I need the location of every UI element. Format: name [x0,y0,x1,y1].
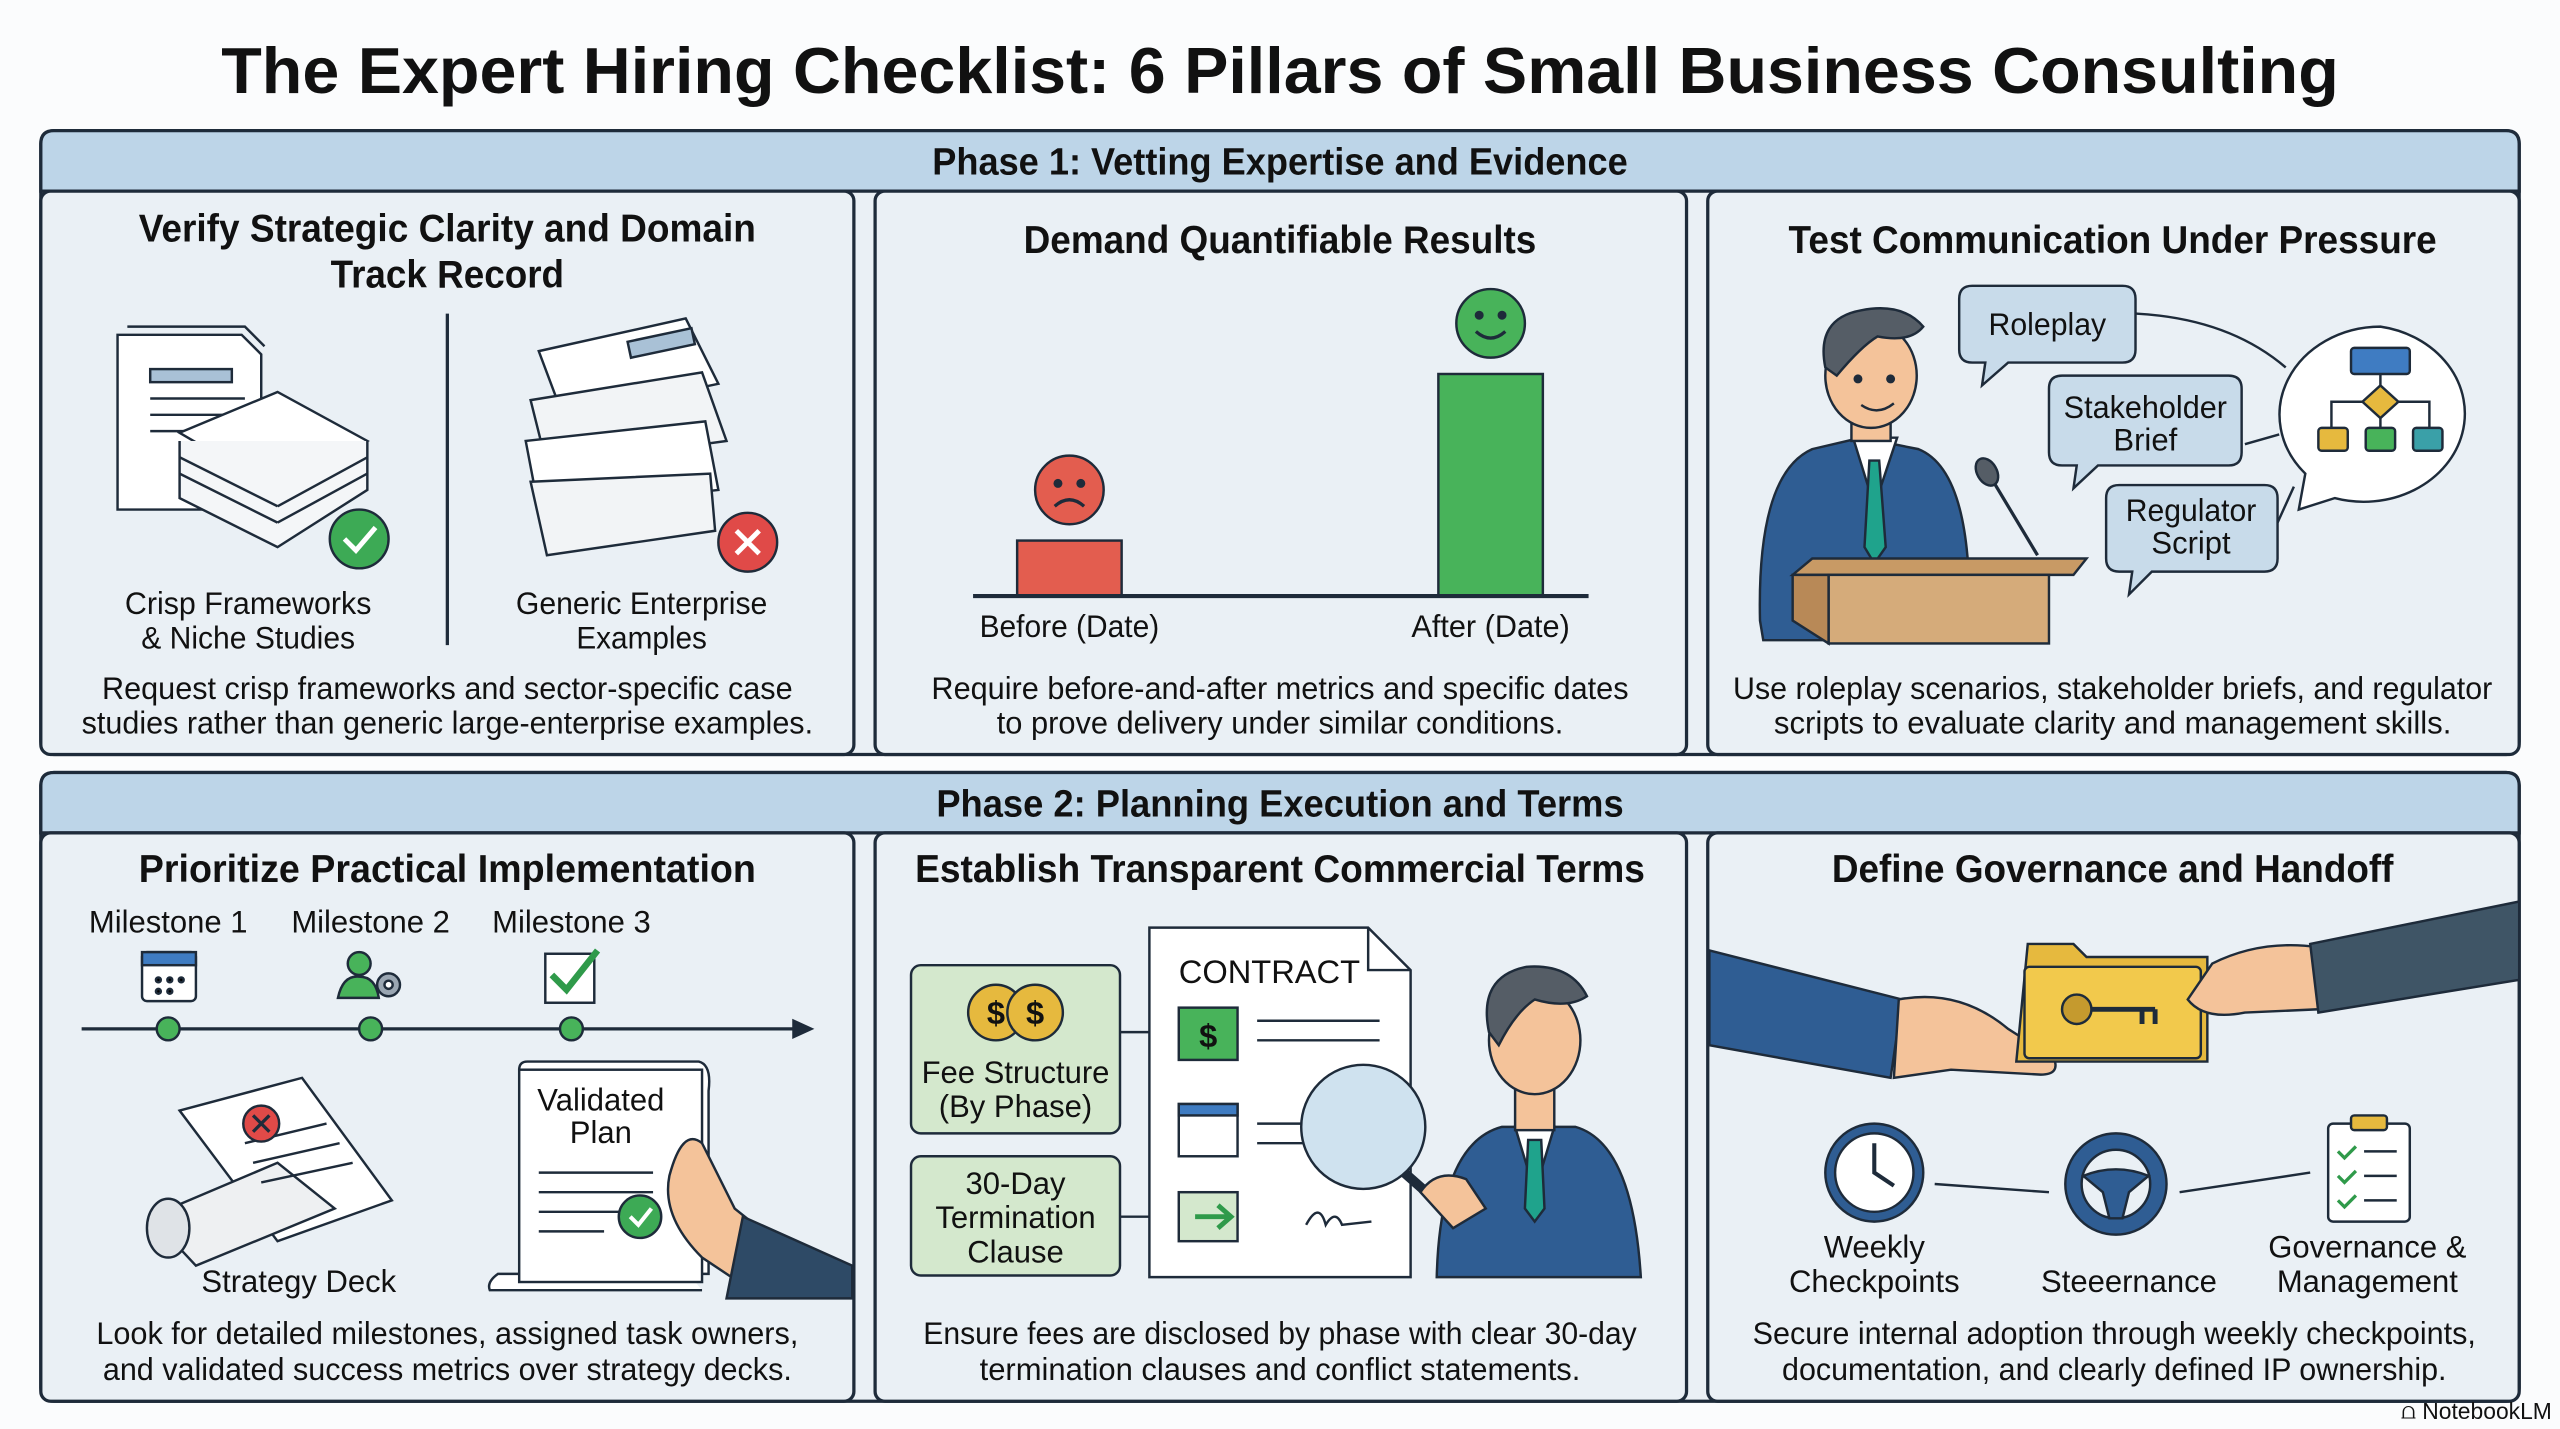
labels [1789,1230,2467,1299]
labels: After (Date) [1411,609,1570,644]
phase 2 header: Phase 2: Planning Execution and Terms [936,783,1624,825]
caption: documentation, and clearly defined IP ownership. [1782,1352,2447,1387]
contract document [1120,928,1411,1277]
caption [82,671,813,740]
bar chart [973,289,1589,596]
icon: validated plan [489,1062,852,1298]
caption [96,1316,798,1387]
caption: scripts to evaluate clarity and management skills. [1774,705,2451,740]
caption [923,1316,1637,1387]
icon: validated plan: Validated [537,1083,664,1118]
labels: Governance & [2268,1230,2467,1265]
icon: validated plan: Plan [570,1115,632,1150]
labels: & Niche Studies [141,620,355,655]
labels: Steeernance [2041,1264,2217,1299]
panel: practical implementation [41,833,854,1401]
labels: Checkpoints [1789,1264,1960,1299]
icon: strategy deck [147,1078,397,1299]
caption: Look for detailed milestones, assigned task owners, [96,1316,798,1351]
callout: roleplay [1959,286,2136,385]
caption: Secure internal adoption through weekly checkpoints, [1753,1316,2476,1351]
termination box: Termination [935,1200,1096,1235]
timeline: Milestone 1 [89,905,247,940]
callout: regulator script [2106,485,2278,594]
title: The Expert Hiring Checklist: 6 Pillars of Small Business Consulting [221,34,2339,107]
icon: crisp documents [118,327,389,568]
timeline: Milestone 2 [291,905,450,940]
caption: and validated success metrics over strategy decks. [103,1352,792,1387]
labels: Weekly [1824,1230,1925,1265]
fee structure box [911,965,1120,1133]
heading: Define Governance and Handoff [1832,848,2394,891]
labels: Examples [576,620,707,655]
watermark: ⩍ NotebookLM [2401,1398,2552,1424]
callout: stakeholder brief: Stakeholder [2064,390,2227,425]
heading: Test Communication Under Pressure [1789,219,2437,262]
phase 1 header: Phase 1: Vetting Expertise and Evidence [932,141,1628,183]
connector lines [2136,314,2294,523]
timeline [82,905,811,1040]
panel: communication [1708,191,2519,755]
heading [139,208,756,296]
labels [125,586,767,655]
icon group: governance icons [1825,1115,2410,1235]
icon: generic stack [526,318,777,572]
caption [1753,1316,2476,1387]
phase 1 header [41,131,2519,191]
caption: Use roleplay scenarios, stakeholder briefs, and regulator [1733,671,2492,706]
labels: Crisp Frameworks [125,586,371,621]
callout: stakeholder brief [2049,376,2242,488]
panel: commercial terms [875,833,1687,1401]
labels: Before (Date) [980,609,1159,644]
callout: stakeholder brief: Brief [2113,423,2178,458]
phase 2 header [41,772,2519,833]
caption [931,671,1629,740]
heading: Verify Strategic Clarity and Domain [139,208,756,251]
caption: to prove delivery under similar conditions. [997,705,1563,740]
icon: speaker at podium [1760,308,2087,643]
phase 2 section [41,772,2519,1401]
caption [1733,671,2492,740]
callout: roleplay: Roleplay [1989,307,2107,342]
contract document: CONTRACT [1179,953,1360,990]
heading: Demand Quantifiable Results [1024,219,1536,262]
fee structure box: (By Phase) [939,1089,1092,1124]
termination box: 30-Day [966,1166,1066,1201]
fee structure box: $ [1026,994,1044,1031]
icon: flowchart bubble [2280,327,2465,510]
fee structure box: Fee Structure [922,1055,1109,1090]
caption: Require before-and-after metrics and specific dates [931,671,1629,706]
labels [980,609,1570,644]
panel: strategic clarity [41,191,854,755]
heading: Track Record [331,253,564,296]
labels: Management [2277,1264,2458,1299]
callout: regulator script: Regulator [2126,493,2256,528]
icon: man with magnifier [1301,967,1641,1277]
icon: strategy deck: Strategy Deck [201,1264,397,1299]
termination box [911,1156,1120,1275]
caption: Request crisp frameworks and sector-specific case [102,671,793,706]
caption: termination clauses and conflict statements. [980,1352,1580,1387]
callout: regulator script: Script [2151,526,2231,561]
heading: Establish Transparent Commercial Terms [915,848,1645,891]
phase 1 section [41,131,2519,755]
termination box: Clause [967,1234,1064,1269]
labels: Generic Enterprise [516,586,767,621]
timeline: Milestone 3 [492,905,651,940]
caption: Ensure fees are disclosed by phase with clear 30-day [923,1316,1637,1351]
caption: studies rather than generic large-enterprise examples. [82,705,813,740]
contract document: $ [1199,1017,1217,1054]
heading: Prioritize Practical Implementation [139,848,756,891]
icon: hands passing folder [1709,901,2519,1078]
fee structure box: $ [987,994,1005,1031]
panel: governance handoff [1708,833,2519,1401]
panel: quantifiable results [875,191,1687,755]
